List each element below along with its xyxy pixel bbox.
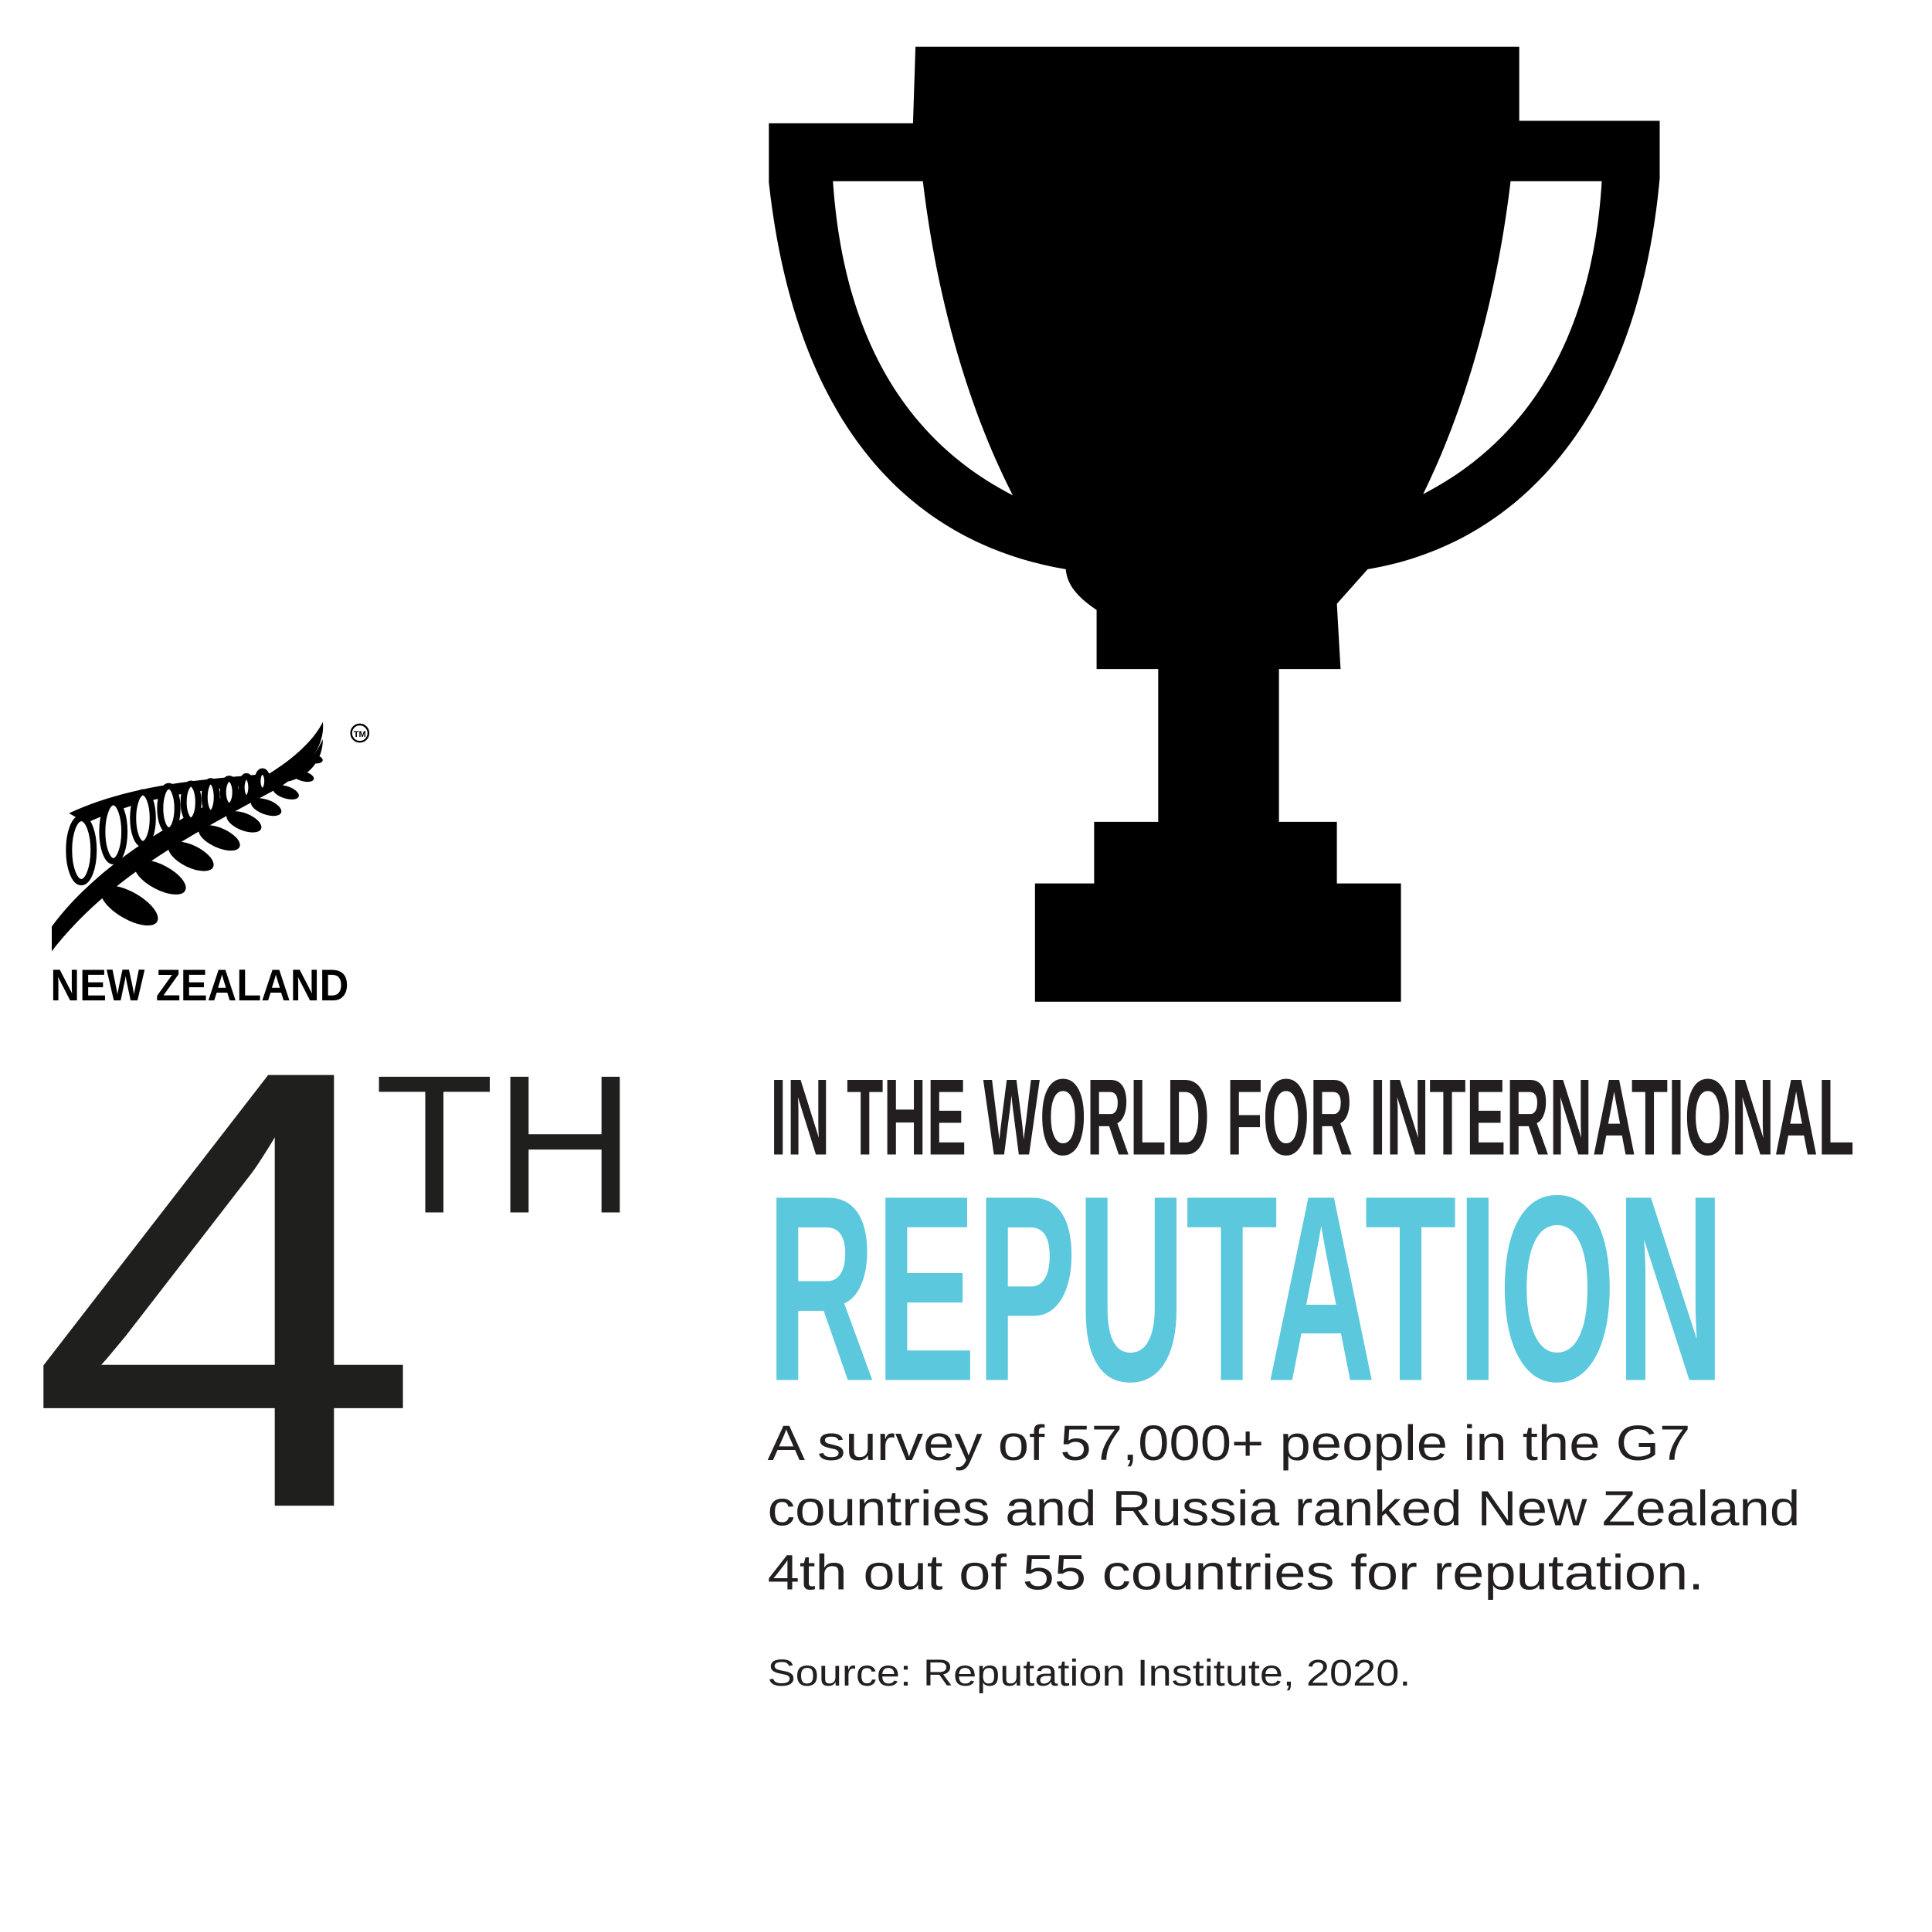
logo: New Zealand fern [50, 722, 368, 1010]
body text [768, 1415, 1800, 1601]
icon: trophy [769, 47, 1659, 1002]
logo: New Zealand fern: NEW ZEALAND [50, 961, 348, 1010]
body text: A survey of 57,000+ people in the G7 [768, 1415, 1690, 1471]
body text: countries and Russia ranked New Zealand [768, 1481, 1800, 1536]
logo: New Zealand fern: TM [354, 730, 366, 739]
big number 4th: TH [375, 1035, 636, 1255]
big number 4th: 4 [27, 939, 424, 1638]
source note: Source: Reputation Institute, 2020. [768, 1653, 1411, 1694]
body text: 4th out of 55 countries for reputation. [768, 1545, 1704, 1601]
big number 4th [27, 939, 636, 1638]
